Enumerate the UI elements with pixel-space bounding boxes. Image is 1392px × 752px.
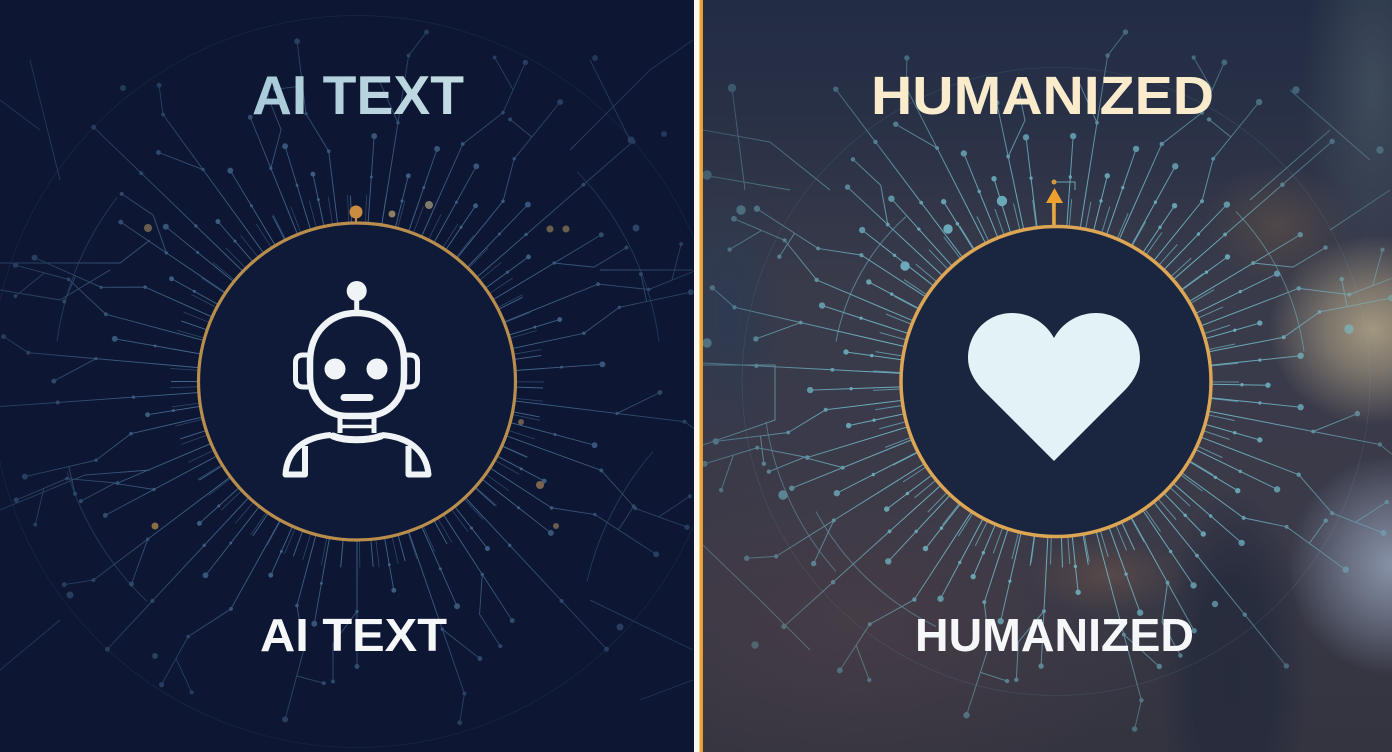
icon: AI circle badge	[198, 223, 516, 540]
label: AI TEXT: AI TEXT	[260, 609, 447, 661]
icon: heart	[968, 313, 1140, 461]
icon: humanized arrow	[1046, 180, 1063, 227]
icon: robot	[286, 281, 428, 474]
divider: white and gold vertical line	[694, 0, 703, 752]
panel: right photo background	[703, 0, 1392, 752]
icon: left orange nodes on ring	[144, 201, 570, 530]
panel: AI text network	[0, 16, 723, 748]
label: HUMANIZED: HUMANIZED	[915, 609, 1194, 661]
icon: humanized circle badge	[901, 226, 1211, 536]
panel: humanized network	[688, 24, 1392, 731]
heading: AI TEXT: AI TEXT	[252, 64, 464, 126]
heading: HUMANIZED: HUMANIZED	[871, 66, 1214, 126]
